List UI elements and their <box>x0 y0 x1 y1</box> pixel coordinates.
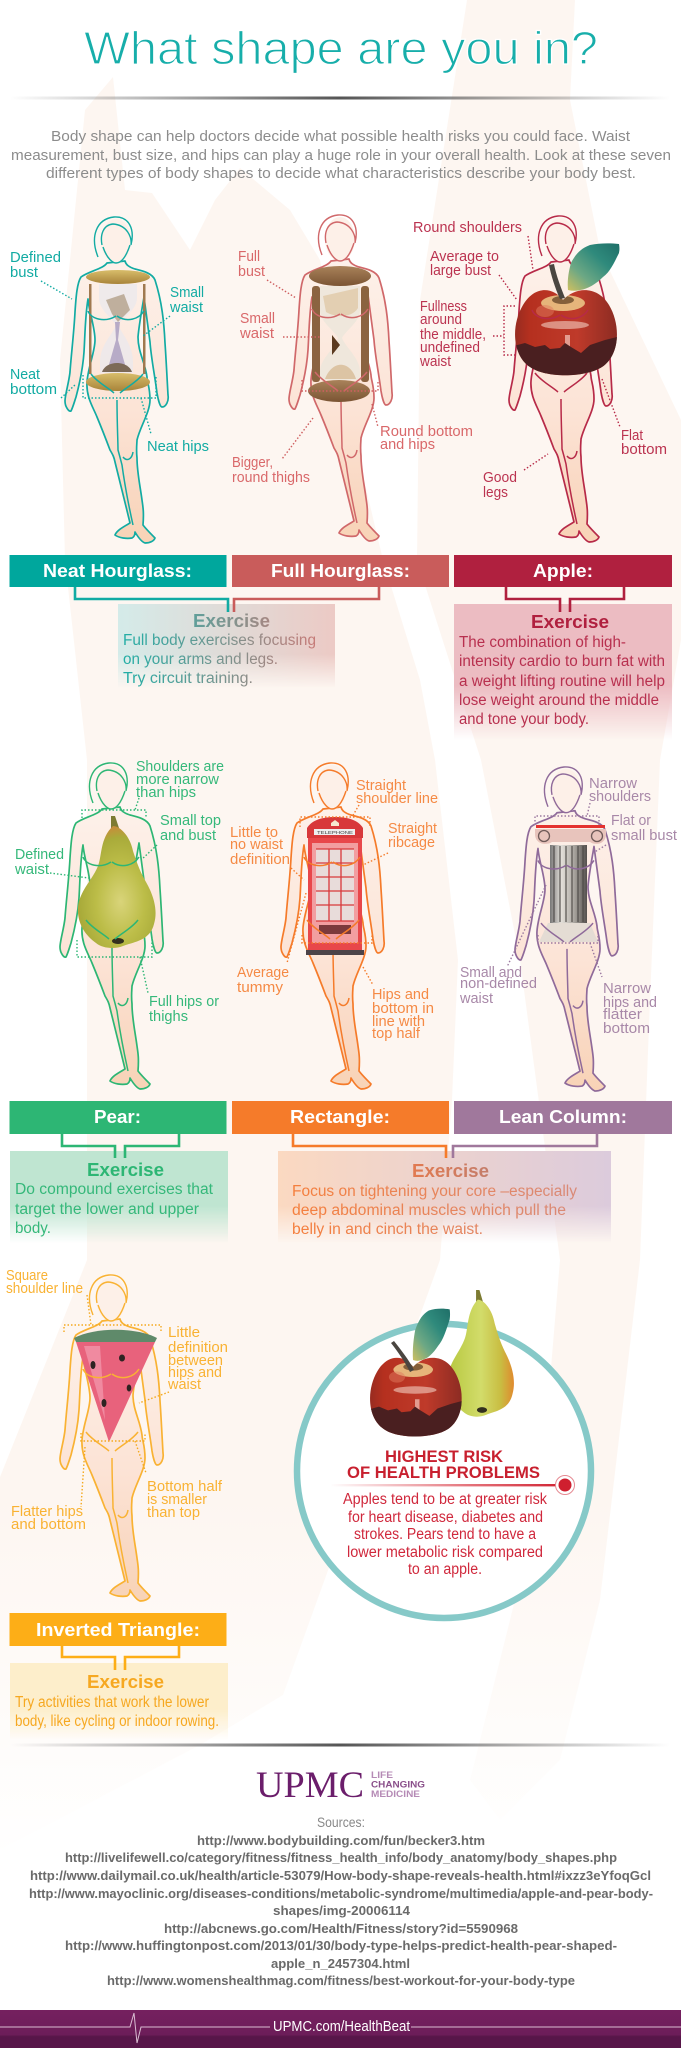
intro text <box>11 128 671 182</box>
type bar: neat hourglass <box>10 555 226 587</box>
annotations: apple: Good <box>483 469 517 486</box>
annotations: inverted triangle: Square <box>6 1267 48 1284</box>
annotations: apple: Round shoulders <box>413 219 522 236</box>
annotations: rectangle: Straight <box>356 777 407 794</box>
annotations: lean column: Narrow <box>603 980 651 997</box>
panel: hourglass exercise: Exercise <box>193 611 270 631</box>
annotations: pear: waist <box>14 861 50 878</box>
panel: apple exercise: and tone your body. <box>459 711 589 728</box>
figure: lean column <box>515 767 618 1091</box>
sources <box>29 1814 653 1988</box>
sources: Sources: <box>317 1814 365 1830</box>
sources: http://www.womenshealthmag.com/fitness/best-workout-for-your-body-type <box>107 1973 575 1988</box>
annotations: pear: more narrow <box>136 771 219 788</box>
annotations: rectangle: no waist <box>230 836 284 853</box>
annotations: full hourglass: waist <box>239 325 275 342</box>
annotations: full hourglass: Small <box>240 310 275 327</box>
annotations: inverted triangle: shoulder line <box>6 1280 83 1297</box>
icon: pear <box>78 816 156 948</box>
annotations: inverted triangle: than top <box>147 1504 200 1521</box>
annotations: neat hourglass: Neat hips <box>147 438 209 455</box>
footer band <box>0 2010 681 2048</box>
annotations: neat hourglass: waist <box>169 299 204 316</box>
annotations: rectangle: shoulder line <box>356 790 438 807</box>
top divider <box>10 96 670 100</box>
annotations: apple: legs <box>483 484 508 501</box>
panel: apple exercise <box>454 604 672 740</box>
risk text: for heart disease, diabetes and <box>348 1509 543 1526</box>
annotations: apple: Average to <box>430 248 499 265</box>
icon: red telephone box: TELEPHONE <box>317 830 353 835</box>
intro text: Body shape can help doctors decide what possible health risks you could face. Waist <box>51 128 631 145</box>
annotations: lean column: shoulders <box>589 788 651 805</box>
annotations: pear: Shoulders are <box>136 758 224 775</box>
annotations: pear: Small top <box>160 812 221 829</box>
annotations: rectangle: tummy <box>237 979 284 996</box>
panel: rectangle and lean column exercise: deep abdominal muscles which pull the <box>292 1202 566 1219</box>
annotations: pear <box>14 758 224 1025</box>
panel: hourglass exercise <box>118 604 335 688</box>
panel: hourglass exercise: Try circuit training. <box>123 670 253 687</box>
connector: inverted triangle to exercise <box>62 1646 179 1670</box>
sources: shapes/img-20006114 <box>273 1903 411 1918</box>
icon: wooden hourglass <box>308 266 371 402</box>
annotations: rectangle: ribcage <box>388 834 435 851</box>
type bar: inverted triangle: Inverted Triangle: <box>36 1620 200 1640</box>
annotations: inverted triangle: and bottom <box>11 1516 86 1533</box>
annotations: inverted triangle: Flatter hips <box>11 1503 83 1520</box>
annotations: inverted triangle: Little <box>168 1324 200 1341</box>
panel: rectangle and lean column exercise: belly in and cinch the waist. <box>292 1221 483 1238</box>
panel: inverted triangle exercise: Try activities that work the lower <box>15 1694 209 1711</box>
icon: apple with leaf <box>510 243 625 385</box>
UPMC logo <box>256 1765 425 1806</box>
type bar: neat hourglass: Neat Hourglass: <box>43 561 192 581</box>
connector: neat hourglass to exercise <box>75 587 228 612</box>
annotations: pear: Defined <box>15 846 64 863</box>
annotations: inverted triangle: waist <box>167 1376 202 1393</box>
annotations: apple: undefined <box>420 339 480 356</box>
icon: watermelon slice <box>74 1330 157 1442</box>
annotations: rectangle <box>230 777 438 1042</box>
annotations: neat hourglass <box>10 249 209 455</box>
annotations: inverted triangle: hips and <box>168 1364 222 1381</box>
panel: apple exercise: a weight lifting routine will help <box>459 673 665 690</box>
UPMC logo: MEDICINE <box>371 1789 420 1800</box>
icon: heartbeat line <box>0 2013 681 2043</box>
annotations: apple: around <box>420 311 462 328</box>
type bar: lean column: Lean Column: <box>499 1107 627 1127</box>
risk text: lower metabolic risk compared <box>347 1544 543 1561</box>
annotations: inverted triangle <box>6 1267 228 1533</box>
type bar: rectangle: Rectangle: <box>290 1107 390 1127</box>
intro text: different types of body shapes to decide what characteristics describe your body best. <box>46 165 636 182</box>
UPMC logo: LIFE <box>371 1770 393 1781</box>
type bar: rectangle <box>232 1101 449 1134</box>
connector: pear to exercise <box>62 1134 179 1158</box>
annotations: full hourglass: bust <box>238 263 266 280</box>
intro text: measurement, bust size, and hips can play a huge role in your overall health. Look at these seven <box>11 147 671 164</box>
panel: pear exercise: target the lower and upper <box>15 1201 199 1218</box>
panel: apple exercise: intensity cardio to burn fat with <box>459 653 665 670</box>
annotations: lean column: small bust <box>611 827 678 844</box>
sources: http://abcnews.go.com/Health/Fitness/story?id=5590968 <box>164 1921 518 1936</box>
panel: pear exercise: Exercise <box>87 1160 164 1180</box>
annotations: apple: Fullness <box>420 298 467 315</box>
annotations: apple <box>413 219 667 501</box>
risk text <box>343 1491 547 1578</box>
panel: pear exercise: Do compound exercises that <box>15 1181 214 1198</box>
annotations: rectangle: top half <box>372 1025 421 1042</box>
annotations: neat hourglass: Neat <box>10 366 41 383</box>
annotations: pear: thighs <box>149 1008 188 1025</box>
sources: http://www.bodybuilding.com/fun/becker3.htm <box>197 1833 485 1848</box>
annotations: rectangle: Little to <box>230 824 278 841</box>
annotations: full hourglass: Bigger, <box>232 454 273 471</box>
panel: apple exercise: Exercise <box>531 612 609 632</box>
annotations: rectangle: Hips and <box>372 986 429 1003</box>
annotations: inverted triangle: between <box>168 1352 223 1369</box>
panel: apple exercise: lose weight around the middle <box>459 692 659 709</box>
annotations: lean column: non-defined <box>460 975 537 992</box>
sources: http://livelifewell.co/category/fitness/fitness_health_info/body_anatomy/body_shapes.php <box>65 1850 617 1865</box>
bottom divider <box>10 1744 670 1746</box>
type bar: pear: Pear: <box>94 1107 141 1127</box>
annotations: pear: Full hips or <box>149 993 219 1010</box>
annotations: neat hourglass: bust <box>10 264 39 281</box>
panel: pear exercise <box>10 1151 228 1243</box>
annotations: neat hourglass: Small <box>170 284 204 301</box>
UPMC logo: CHANGING <box>371 1780 425 1790</box>
sources: apple_n_2457304.html <box>271 1956 410 1971</box>
annotations: lean column: Flat or <box>611 812 651 829</box>
icon: pear and apple <box>366 1290 514 1446</box>
annotations: full hourglass: Full <box>238 248 260 265</box>
annotations: full hourglass: round thighs <box>232 469 310 486</box>
annotations: rectangle: Straight <box>388 820 438 837</box>
annotations: apple: large bust <box>430 262 492 279</box>
annotations: lean column <box>459 775 678 1037</box>
annotations: rectangle: line with <box>372 1013 425 1030</box>
annotations: neat hourglass: bottom <box>10 381 57 398</box>
panel: inverted triangle exercise: body, like cycling or indoor rowing. <box>15 1713 219 1730</box>
annotations: lean column: Small and <box>460 964 522 981</box>
panel: rectangle and lean column exercise: Exercise <box>412 1161 489 1181</box>
annotations: inverted triangle: Bottom half <box>147 1478 223 1495</box>
panel: hourglass exercise: on your arms and legs. <box>123 651 278 668</box>
icon: brass hourglass <box>86 270 150 391</box>
annotations: lean column: hips and <box>603 994 657 1011</box>
type bar: apple <box>454 555 672 587</box>
title: What shape are you in? <box>84 22 598 74</box>
panel: highest risk circle <box>297 1290 591 1618</box>
connector: rectangle and lean column to exercise <box>293 1134 597 1158</box>
figure: neat hourglass <box>65 217 168 543</box>
type bar: lean column <box>454 1101 672 1134</box>
panel: pear exercise: body. <box>15 1220 51 1237</box>
type bar: inverted triangle <box>10 1613 226 1646</box>
figure: inverted triangle <box>60 1275 163 1601</box>
connector: apple to exercise <box>506 587 624 612</box>
risk heading: OF HEALTH PROBLEMS <box>347 1464 540 1482</box>
annotations: full hourglass <box>232 248 473 486</box>
panel: inverted triangle exercise <box>10 1663 228 1740</box>
icon: red telephone box <box>306 817 364 955</box>
type bar: apple: Apple: <box>533 561 593 581</box>
risk marker line <box>330 1476 574 1494</box>
annotations: apple: Flat <box>621 427 644 444</box>
type bar: pear <box>10 1101 226 1134</box>
figure: apple <box>509 216 625 542</box>
annotations: apple: the middle, <box>420 326 486 343</box>
annotations: apple: waist <box>419 353 452 370</box>
figure: rectangle <box>281 763 384 1089</box>
annotations: pear: and bust <box>160 827 217 844</box>
annotations: inverted triangle: is smaller <box>147 1491 207 1508</box>
UPMC logo: UPMC <box>256 1765 364 1806</box>
annotations: lean column: flatter <box>603 1006 642 1023</box>
panel: inverted triangle exercise: Exercise <box>87 1672 164 1692</box>
risk text: Apples tend to be at greater risk <box>343 1491 547 1508</box>
figure: pear <box>60 763 163 1089</box>
annotations: rectangle: definition <box>230 851 290 868</box>
annotations: lean column: waist <box>459 990 494 1007</box>
annotations: lean column: Narrow <box>589 775 637 792</box>
risk heading: HIGHEST RISK <box>385 1448 503 1466</box>
annotations: apple: bottom <box>621 441 667 458</box>
connector: full hourglass to exercise <box>234 587 379 612</box>
annotations: neat hourglass: Defined <box>10 249 61 266</box>
panel: rectangle and lean column exercise: Focus on tightening your core –especially <box>292 1183 577 1200</box>
annotations: pear: than hips <box>136 784 196 801</box>
risk heading <box>347 1448 540 1482</box>
risk text: to an apple. <box>408 1561 482 1578</box>
figure: full hourglass <box>289 215 392 541</box>
icon: ionic column <box>535 825 606 942</box>
type bar: full hourglass <box>232 555 449 587</box>
annotations: rectangle: bottom in <box>372 1000 434 1017</box>
sources: http://www.mayoclinic.org/diseases-conditions/metabolic-syndrome/multimedia/apple-and-pear-body- <box>29 1886 653 1901</box>
type bar: full hourglass: Full Hourglass: <box>271 561 410 581</box>
annotations: rectangle: Average <box>237 964 289 981</box>
footer url: UPMC.com/HealthBeat <box>273 2019 410 2035</box>
annotations: inverted triangle: definition <box>168 1339 228 1356</box>
sources: http://www.huffingtonpost.com/2013/01/30/body-type-helps-predict-health-pear-shaped- <box>65 1938 617 1953</box>
panel: apple exercise: The combination of high- <box>459 634 626 651</box>
risk text: strokes. Pears tend to have a <box>354 1526 536 1543</box>
sources: http://www.dailymail.co.uk/health/article-53079/How-body-shape-reveals-health.html#ixzz3eYfoqGcl <box>30 1868 651 1883</box>
panel: hourglass exercise: Full body exercises focusing <box>123 632 316 649</box>
panel: rectangle and lean column exercise <box>278 1151 611 1243</box>
annotations: lean column: bottom <box>603 1020 650 1037</box>
annotations: full hourglass: and hips <box>380 436 435 453</box>
annotations: full hourglass: Round bottom <box>380 423 473 440</box>
